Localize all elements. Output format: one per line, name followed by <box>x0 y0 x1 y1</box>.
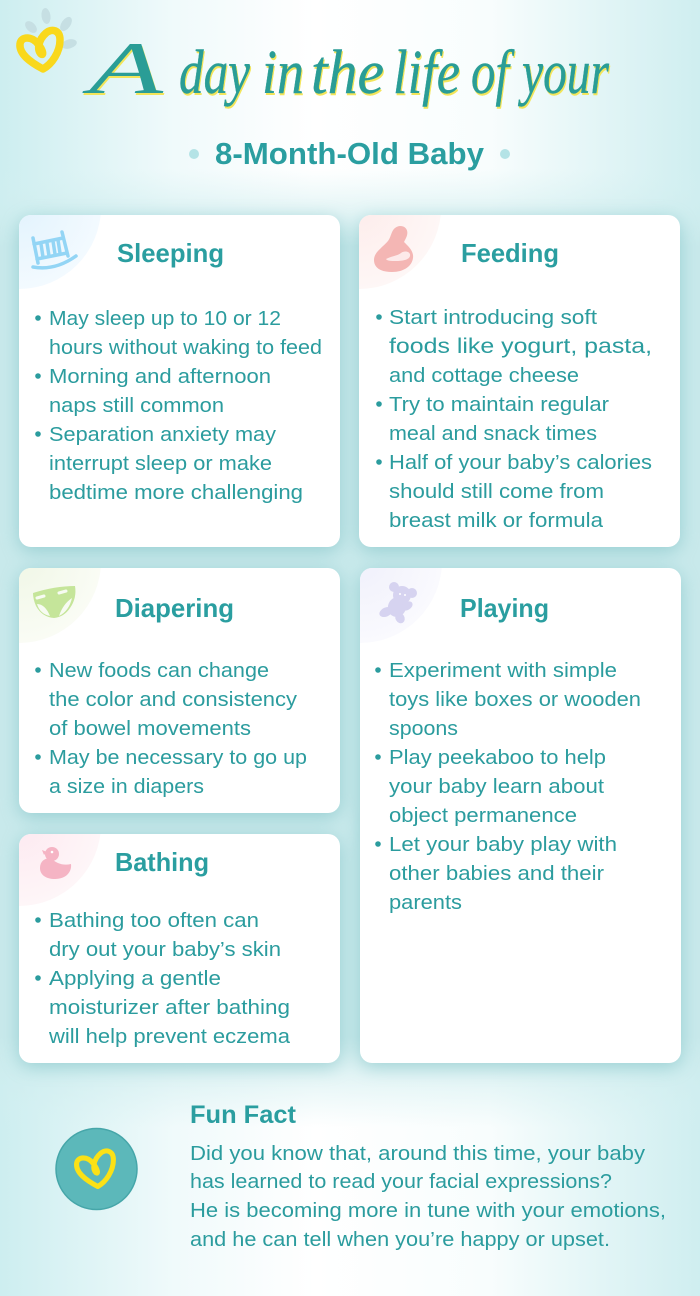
list: feeding: foods like yogurt, pasta, <box>389 334 652 358</box>
list: sleeping: hours without waking to feed <box>49 336 322 359</box>
list: diapering: the color and consistency <box>49 688 298 711</box>
heading: fun fact: Fun Fact <box>190 1101 297 1129</box>
subtitle: 8-Month-Old Baby <box>215 136 485 171</box>
list: playing <box>375 659 641 914</box>
title: your <box>517 39 610 107</box>
fun fact text <box>190 1101 666 1251</box>
icon: fun fact heart badge <box>56 1128 137 1210</box>
icon: crib <box>33 232 76 268</box>
icon: teddy bear <box>378 582 417 625</box>
title <box>81 28 610 110</box>
icon: rubber duck <box>40 847 71 879</box>
panel: feeding <box>359 215 680 547</box>
heading: feeding: Feeding <box>461 238 559 268</box>
title: in <box>262 39 304 107</box>
list: diapering: a size in diapers <box>49 775 204 798</box>
body: fun fact: has learned to read your facial expressions? <box>190 1171 612 1193</box>
heading: sleeping: Sleeping <box>117 238 224 268</box>
list: diapering <box>35 659 307 798</box>
title: the <box>311 39 384 107</box>
card shadows <box>19 219 681 1067</box>
panel: sleeping <box>19 215 340 547</box>
list: sleeping: interrupt sleep or make <box>49 452 272 475</box>
body: fun fact <box>190 1143 666 1251</box>
list: sleeping: Separation anxiety may <box>49 423 277 446</box>
list: sleeping: Morning and afternoon <box>49 365 271 388</box>
icon: mother and baby <box>374 226 413 272</box>
panel: diapering <box>19 568 340 813</box>
list: diapering: of bowel movements <box>49 717 251 740</box>
heading: bathing: Bathing <box>115 847 209 877</box>
list: feeding: should still come from <box>389 480 604 503</box>
list: feeding: Half of your baby’s calories <box>389 451 652 474</box>
title: A <box>81 28 164 110</box>
list: feeding: Try to maintain regular <box>389 393 609 416</box>
panel: playing <box>360 568 681 1063</box>
list: bathing: moisturizer after bathing <box>49 996 290 1019</box>
list: diapering: New foods can change <box>49 659 269 682</box>
list: feeding: and cottage cheese <box>389 364 579 387</box>
body: fun fact: and he can tell when you’re happy or upset. <box>190 1229 610 1251</box>
logo: yellow heart with rays <box>20 7 78 69</box>
heading: diapering: Diapering <box>115 593 234 623</box>
title: day <box>179 39 250 107</box>
list: playing: other babies and their <box>389 862 604 885</box>
list: playing: Let your baby play with <box>389 833 617 856</box>
list: feeding: breast milk or formula <box>389 509 604 532</box>
list: sleeping: bedtime more challenging <box>49 481 303 504</box>
body: fun fact: Did you know that, around this time, your baby <box>190 1143 645 1165</box>
list: playing: parents <box>389 891 462 914</box>
list: playing: toys like boxes or wooden <box>389 688 641 711</box>
list: sleeping: naps still common <box>49 394 224 417</box>
list: sleeping: May sleep up to 10 or 12 <box>49 307 281 330</box>
list: bathing <box>35 909 291 1048</box>
list: bathing: dry out your baby’s skin <box>49 938 281 961</box>
title: life <box>393 39 460 107</box>
list: playing: Experiment with simple <box>389 659 617 682</box>
list: bathing: Applying a gentle <box>49 967 221 990</box>
list: bathing: Bathing too often can <box>49 909 259 932</box>
list: sleeping <box>35 307 322 504</box>
list: diapering: May be necessary to go up <box>49 746 307 769</box>
heading: playing: Playing <box>460 593 549 623</box>
list: playing: Play peekaboo to help <box>389 746 606 769</box>
icon: diaper <box>33 586 75 618</box>
list: playing: object permanence <box>389 804 577 827</box>
list: playing: spoons <box>389 717 458 740</box>
list: feeding: Start introducing soft <box>389 306 597 329</box>
panel: bathing <box>19 834 340 1063</box>
list: playing: your baby learn about <box>389 775 604 798</box>
list: feeding <box>376 306 652 532</box>
title: of <box>471 39 515 107</box>
list: bathing: will help prevent eczema <box>48 1025 291 1048</box>
list: feeding: meal and snack times <box>389 422 597 445</box>
body: fun fact: He is becoming more in tune with your emotions, <box>190 1200 666 1222</box>
